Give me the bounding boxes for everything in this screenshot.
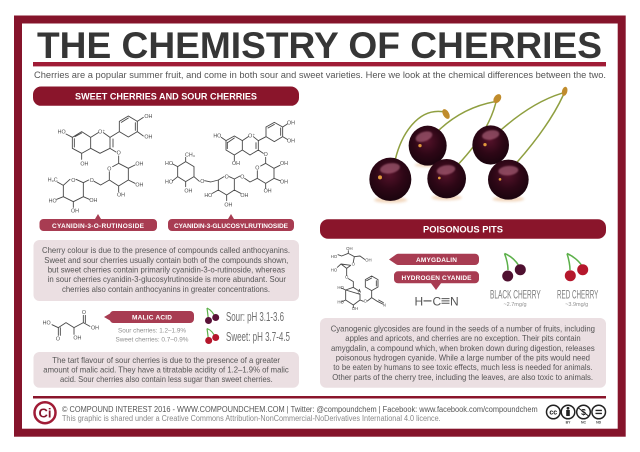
stem tips — [441, 86, 568, 120]
text: red cherry — [557, 289, 598, 308]
footer text: © COMPOUND INTEREST 2016 - WWW.COMPOUNDCHEM.COM | Twitter: @compoundchem | Facebook: www.facebook.com/compoundchem — [62, 405, 538, 414]
molecule: cyanidin-3-o-rutinoside: H₃C — [48, 178, 58, 184]
text: sweet pH: Sweet: pH 3.7-4.5 — [226, 330, 290, 344]
molecule: cyanidin-3-glucosylrutinoside: OH — [224, 202, 232, 208]
label: cyanidin-3-o-rutinoside: CYANIDIN-3-O-RUTINOSIDE — [52, 223, 145, 230]
label: amygdalin: AMYGDALIN — [416, 257, 457, 264]
text: black cherry — [490, 289, 541, 308]
stems — [395, 93, 563, 165]
molecule: malic acid: O — [56, 336, 60, 342]
molecule: amygdalin: HO — [331, 267, 338, 272]
molecule: amygdalin: O — [345, 275, 349, 280]
text: red cherry: ~3.9mg/g — [565, 302, 588, 308]
molecule: hydrogen cyanide: H — [414, 294, 423, 308]
photo: cherries — [369, 86, 568, 203]
text: malic acid percentages: Sweet cherries: 0.7–0.9% — [116, 336, 189, 344]
molecule: cyanidin-3-glucosylrutinoside: O — [255, 165, 259, 171]
text block: anthocyanins: Sweet and sour cherries usually contain both of the compounds shown, — [44, 256, 288, 265]
heading: sweet cherries and sour cherries — [33, 86, 299, 106]
molecule: cyanidin-3-o-rutinoside: OH — [135, 161, 143, 167]
cherry highlights — [379, 129, 519, 176]
label: hydrogen cyanide — [394, 271, 479, 290]
heading: sweet cherries and sour cherries: SWEET CHERRIES AND SOUR CHERRIES — [75, 92, 257, 102]
molecule: malic acid: O — [82, 310, 86, 316]
text: black cherry: BLACK CHERRY — [490, 289, 541, 301]
molecule: cyanidin-3-glucosylrutinoside: OH — [184, 189, 192, 195]
molecule: amygdalin: HO — [331, 254, 338, 259]
text block: anthocyanins — [34, 240, 299, 301]
molecule: amygdalin: OH — [365, 257, 372, 262]
molecule: cyanidin-3-o-rutinoside: OH — [144, 114, 152, 120]
molecule: cyanidin-3-glucosylrutinoside: OH — [232, 161, 240, 167]
molecule: amygdalin: O — [364, 299, 368, 304]
molecule: cyanidin-3-glucosylrutinoside: OH — [264, 189, 272, 195]
text block: anthocyanins: but sweet cherries contain primarily cyanidin-3-o-rutinoside, whereas — [48, 265, 285, 274]
label: hydrogen cyanide: HYDROGEN CYANIDE — [402, 275, 472, 282]
icons: creative commons: cc — [549, 410, 557, 416]
title: THE CHEMISTRY OF CHERRIES — [37, 24, 602, 66]
molecule: cyanidin-3-o-rutinoside — [48, 114, 152, 215]
footer rule — [33, 396, 606, 398]
molecule: cyanidin-3-o-rutinoside: OH — [117, 193, 125, 199]
molecule: amygdalin: N — [383, 303, 386, 308]
text: sour pH: Sour: pH 3.1-3.6 — [226, 310, 284, 324]
cherry shadows — [374, 163, 524, 203]
icons: creative commons: $ — [581, 407, 586, 417]
text block: cyanogenic glycosides — [320, 318, 606, 388]
molecule: hydrogen cyanide — [414, 294, 459, 308]
text: malic acid percentages: Sour cherries: 1.2–1.9% — [118, 327, 186, 334]
heading: poisonous pits: POISONOUS PITS — [423, 224, 503, 234]
text block: cyanogenic glycosides: Cyanogenic glycosides are found in the seeds of a number of fruits, including — [331, 324, 595, 334]
text block: malic acid: acid. Sour cherries also contain less sugar than sweet cherries. — [60, 375, 273, 384]
text block: malic acid: amount of malic acid. They have a titratable acidity of 1.2–1.9% of malic — [43, 365, 289, 374]
label: cyanidin-3-glucosylrutinoside: CYANIDIN-3-GLUCOSYLRUTINOSIDE — [174, 223, 289, 230]
text block: anthocyanins: Cherry colour is due to the presence of compounds called anthocyanins. — [42, 246, 290, 255]
title rule — [33, 62, 606, 66]
molecule: cyanidin-3-o-rutinoside: O — [107, 166, 111, 172]
text block: malic acid: The tart flavour of sour cherries is due to the presence of a greater — [52, 356, 280, 365]
intro text: Cherries are a popular summer fruit, and come in both sour and sweet varieties. Here we look at the chemical differences between the two. — [34, 70, 606, 80]
footer text — [62, 405, 538, 423]
molecule: amygdalin: HO — [337, 299, 345, 304]
molecule: cyanidin-3-o-rutinoside: O — [117, 151, 121, 157]
text block: cyanogenic glycosides: amygdalin, a compound which, when broken down during digestion, releases — [331, 344, 595, 353]
molecule: malic acid — [43, 310, 99, 342]
text block: cyanogenic glycosides: to be eaten by humans to see toxic effects, much less is needed for animals. — [333, 363, 593, 372]
text block: malic acid — [34, 352, 299, 388]
molecule: cyanidin-3-glucosylrutinoside: HO — [165, 161, 173, 167]
text block: anthocyanins: cherries also contain anthocyanins in greater concentrations. — [62, 285, 270, 294]
text: red cherry: RED CHERRY — [557, 289, 598, 301]
logo: compound interest — [34, 402, 56, 423]
molecule: cyanidin-3-glucosylrutinoside: HO — [204, 193, 212, 199]
label: cyanidin-3-o-rutinoside — [40, 214, 157, 231]
molecule: cyanidin-3-glucosylrutinoside: OH — [280, 161, 288, 167]
molecule: cyanidin-3-o-rutinoside: O — [90, 178, 94, 184]
icon: red cherry — [565, 254, 588, 281]
molecule: cyanidin-3-glucosylrutinoside: O — [200, 179, 204, 185]
molecule: amygdalin: HO — [337, 285, 345, 290]
logo: compound interest: Ci — [38, 405, 52, 420]
label: malic acid: MALIC ACID — [132, 315, 172, 322]
molecule: hydrogen cyanide: C — [432, 294, 442, 308]
molecule: cyanidin-3-glucosylrutinoside: OH — [287, 138, 295, 144]
molecule: cyanidin-3-glucosylrutinoside: O — [225, 174, 229, 180]
text block: cyanogenic glycosides: apples and apricots, and cherries are no exception. Their pits contain — [345, 334, 581, 343]
icon: sour cherries — [205, 308, 219, 324]
molecule: cyanidin-3-glucosylrutinoside: O — [240, 174, 244, 180]
text block: cyanogenic glycosides: poisonous hydrogen cyanide. While a large number of the pits would need — [336, 354, 590, 362]
molecule: cyanidin-3-glucosylrutinoside: OH — [240, 193, 248, 199]
label: cyanidin-3-glucosylrutinoside — [168, 214, 294, 231]
molecule: malic acid: OH — [73, 336, 81, 342]
molecule: amygdalin — [331, 246, 386, 311]
label: amygdalin — [389, 254, 479, 265]
molecule: amygdalin: OH — [346, 246, 353, 251]
molecule: cyanidin-3-glucosylrutinoside: HO — [165, 179, 173, 185]
molecule: cyanidin-3-glucosylrutinoside — [165, 120, 295, 208]
molecule: hydrogen cyanide: N — [450, 294, 459, 308]
molecule: cyanidin-3-o-rutinoside: O⁺ — [98, 130, 105, 136]
molecule: cyanidin-3-o-rutinoside: OH — [89, 198, 97, 204]
molecule: cyanidin-3-glucosylrutinoside: O⁺ — [248, 134, 255, 140]
text block: cyanogenic glycosides: Other parts of the cherry tree, including the leaves, are also toxic to animals. — [332, 373, 593, 382]
molecule: amygdalin: O — [358, 289, 362, 294]
molecule: cyanidin-3-glucosylrutinoside: O — [264, 152, 268, 158]
panel: sweet and sour cherries — [33, 86, 299, 388]
molecule: cyanidin-3-o-rutinoside: OH — [144, 135, 152, 141]
molecule: cyanidin-3-o-rutinoside: OH — [80, 161, 88, 167]
icons: creative commons — [546, 405, 606, 424]
icon: sweet cherries — [205, 328, 219, 344]
molecule: cyanidin-3-o-rutinoside: OH — [71, 209, 79, 215]
molecule: cyanidin-3-o-rutinoside: O — [71, 178, 75, 184]
text: malic acid percentages — [116, 327, 189, 344]
cherry bodies — [369, 125, 529, 201]
text: black cherry: ~2.7mg/g — [503, 302, 527, 308]
molecule: amygdalin: OH — [352, 306, 358, 311]
footer text: This graphic is shared under a Creative Commons Attribution-NonCommercial-NoDerivatives International 4.0 licence. — [62, 414, 441, 423]
molecule: cyanidin-3-o-rutinoside: HO — [49, 198, 57, 204]
molecule: cyanidin-3-glucosylrutinoside: OH — [280, 179, 288, 185]
molecule: cyanidin-3-o-rutinoside: HO — [58, 130, 66, 136]
molecule: cyanidin-3-o-rutinoside: OH — [135, 183, 143, 189]
molecule: cyanidin-3-glucosylrutinoside: HO — [213, 134, 221, 140]
molecule: cyanidin-3-glucosylrutinoside: CH₃ — [185, 153, 195, 159]
icons: creative commons: BY — [566, 420, 571, 424]
icon: black cherry — [502, 254, 526, 282]
molecule: amygdalin: O — [352, 261, 356, 266]
icons: creative commons: ND — [596, 420, 602, 424]
icons: creative commons: NC — [581, 420, 586, 424]
text block: anthocyanins: in sour cherries cyanidin-3-glucosylrutinoside is more abundant. Sour — [48, 275, 286, 284]
molecule: cyanidin-3-glucosylrutinoside: OH — [287, 120, 295, 126]
label: malic acid — [104, 311, 194, 323]
molecule: malic acid: HO — [43, 320, 51, 326]
heading: poisonous pits — [320, 219, 606, 239]
molecule: malic acid: OH — [91, 326, 99, 332]
panel: poisonous pits — [320, 219, 606, 388]
